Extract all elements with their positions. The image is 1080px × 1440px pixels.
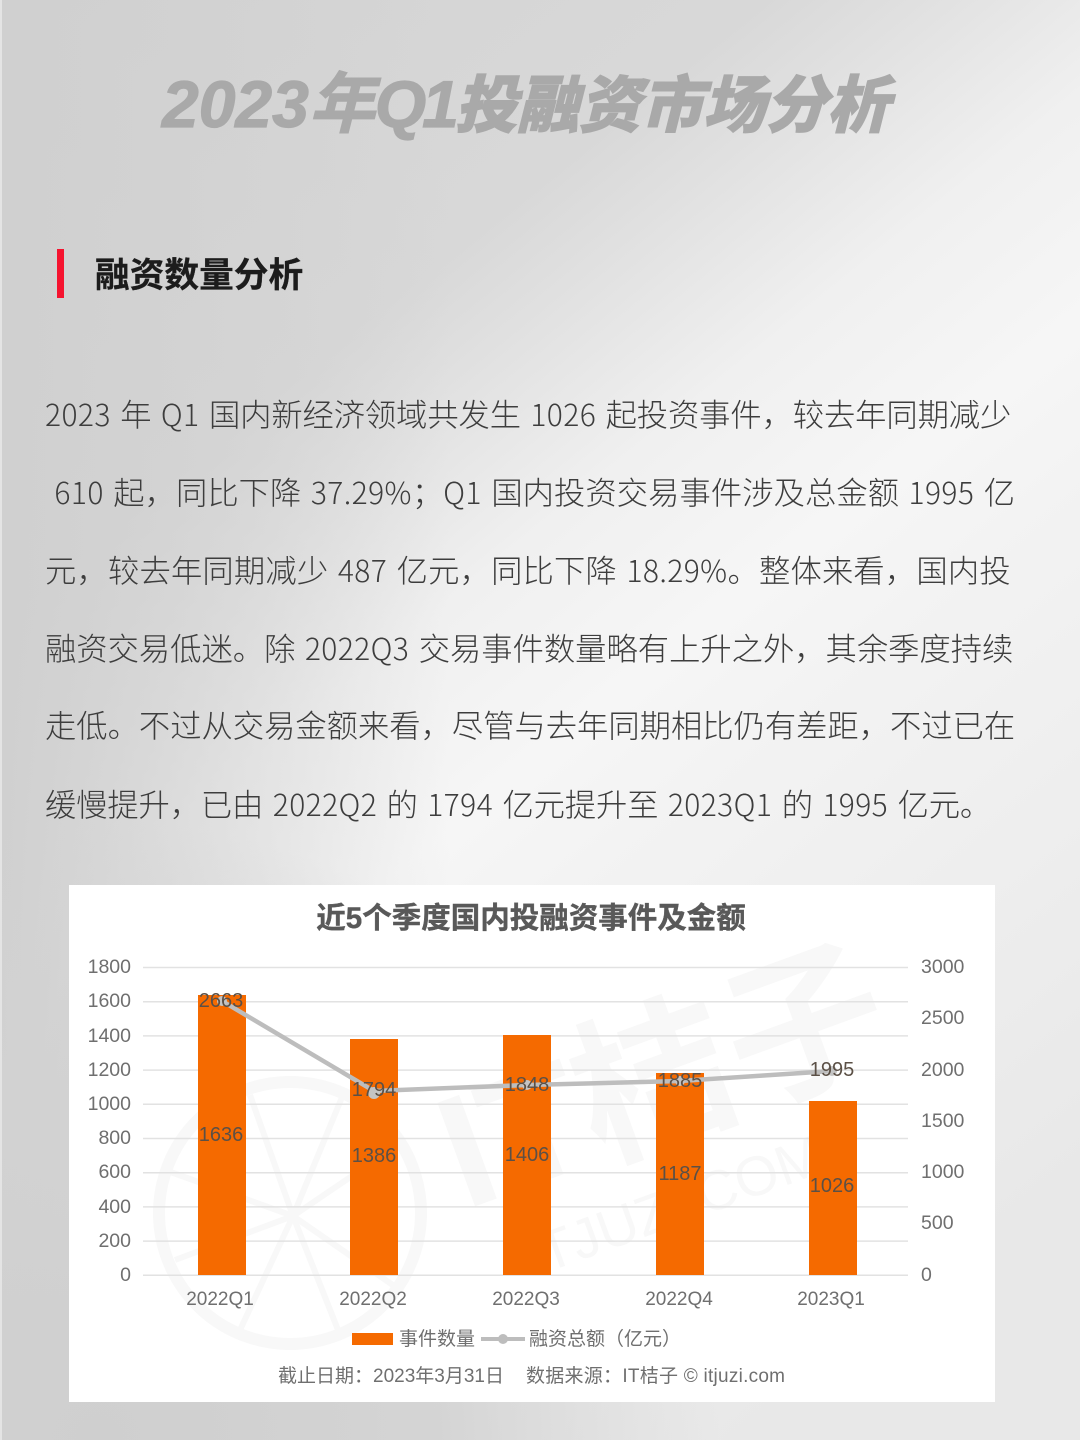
legend: 事件数量 [399,1328,475,1350]
left axis: 1600 [88,990,131,1012]
watermark: ITJUZI.COM [515,1123,831,1289]
data labels: 1995 [810,1059,854,1081]
right axis: 2000 [921,1059,965,1081]
bars [198,995,857,1275]
category labels: 2022Q1 [186,1289,254,1310]
right axis: 0 [921,1264,932,1286]
data labels: 1026 [810,1175,854,1197]
source note: 截止日期：2023年3月31日 [278,1365,504,1387]
data labels: 1386 [352,1145,396,1167]
data labels [199,990,854,1197]
data labels: 1406 [505,1144,549,1166]
watermark: IT桔子 [415,916,911,1242]
title: 2023年Q1投融资市场分析 [162,67,889,141]
chart title: 近5个季度国内投融资事件及金额 [316,902,746,935]
body text: 融资交易低迷。除 2022Q3 交易事件数量略有上升之外，其余季度持续 [45,625,1013,670]
heading accent bar [57,249,64,298]
left axis [88,956,131,1286]
chart panel [69,885,995,1402]
source note [278,1365,785,1387]
body text: 610 起，同比下降 37.29%；Q1 国内投资交易事件涉及总金额 1995 亿 [54,469,1015,514]
category labels: 2022Q2 [339,1289,407,1310]
left axis: 1400 [88,1025,131,1047]
left axis: 400 [98,1196,131,1218]
left axis: 1800 [88,956,131,978]
right axis: 1000 [921,1161,965,1183]
left axis: 0 [120,1264,131,1286]
left axis: 1200 [88,1059,131,1081]
heading: financing count analysis: 融资数量分析 [95,257,303,295]
left axis: 200 [98,1230,131,1252]
right axis: 3000 [921,956,965,978]
data labels: 2663 [199,990,243,1012]
source note: 数据来源：IT桔子 © itjuzi.com [526,1365,785,1387]
left axis: 600 [98,1161,131,1183]
body text: 缓慢提升，已由 2022Q2 的 1794 亿元提升至 2023Q1 的 1995 亿元。 [45,781,991,826]
legend [352,1328,681,1350]
data labels: 1885 [658,1070,702,1092]
category labels: 2022Q4 [645,1289,713,1310]
category labels [186,1289,865,1310]
body text [45,391,1015,826]
left axis: 800 [98,1127,131,1149]
watermark [159,916,911,1344]
data labels: 1187 [658,1163,702,1185]
grid lines [143,968,908,1275]
data labels: 1848 [505,1074,549,1096]
body text: 走低。不过从交易金额来看，尽管与去年同期相比仍有差距，不过已在 [45,702,1015,747]
right axis: 1500 [921,1110,965,1132]
line series [217,996,837,1099]
category labels: 2022Q3 [492,1289,560,1310]
left axis: 1000 [88,1093,131,1115]
body text: 元，较去年同期减少 487 亿元，同比下降 18.29%。整体来看，国内投 [45,547,1011,592]
data labels: 1636 [199,1124,243,1146]
legend: 融资总额（亿元） [529,1328,681,1350]
right axis [921,956,965,1286]
body text: 2023 年 Q1 国内新经济领域共发生 1026 起投资事件，较去年同期减少 [45,391,1011,436]
right axis: 500 [921,1212,954,1234]
right axis: 2500 [921,1007,965,1029]
data labels: 1794 [352,1079,396,1101]
category labels: 2023Q1 [797,1289,865,1310]
